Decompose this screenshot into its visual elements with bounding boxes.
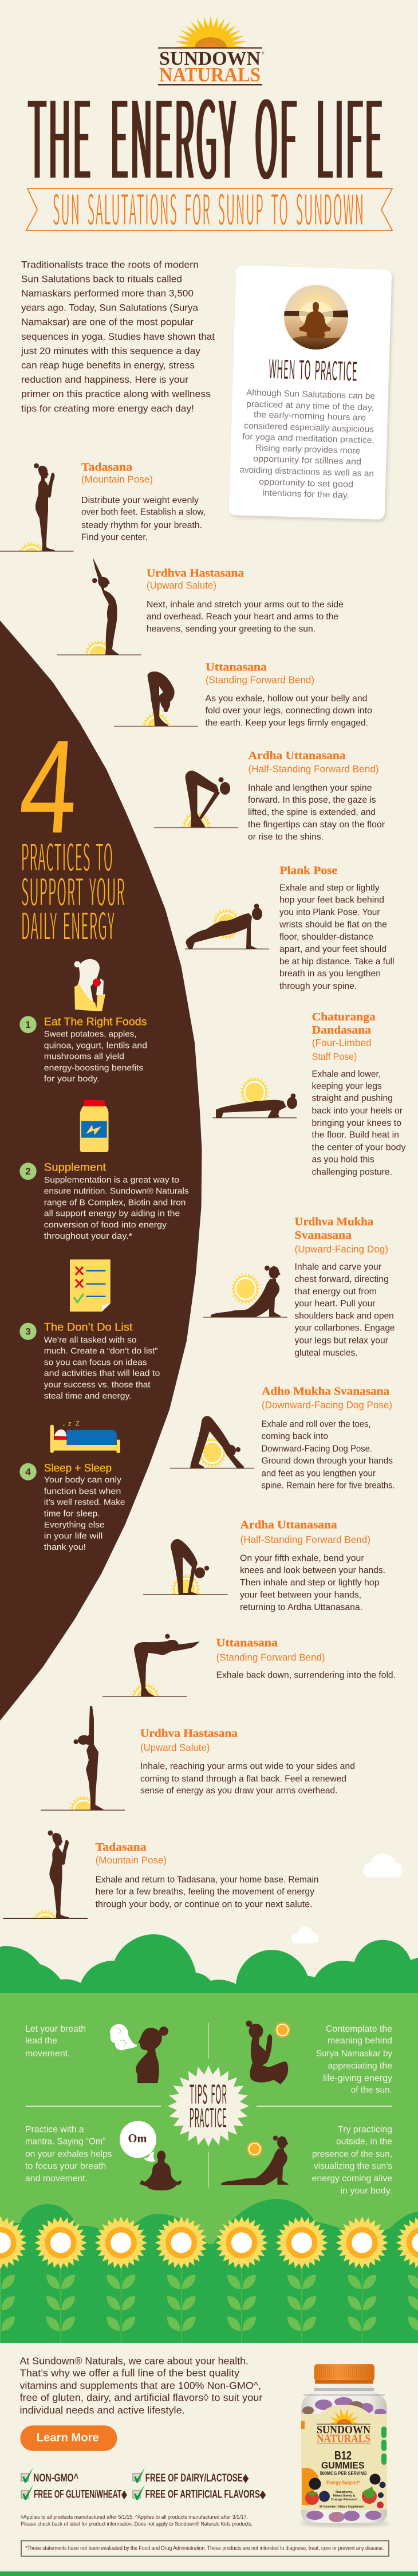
claims checklist: FREE OF DAIRY/LACTOSE◆	[145, 2472, 249, 2484]
pose 8: Adho Mukha Svanasana: spine. Remain here for five breaths.	[261, 1481, 395, 1490]
practice 1: eat the right foods	[19, 959, 147, 1084]
pose 9: Ardha Uttanasana: Then inhale and step or lightly hop	[240, 1578, 380, 1588]
practice 2: supplement: conversion of food into energy	[44, 1220, 167, 1230]
product: B12 gummies bottle: Raspberry,	[336, 2491, 353, 2494]
pose 5: Plank Pose	[185, 865, 395, 991]
card text: opportunity to set good	[259, 477, 353, 489]
product: B12 gummies bottle: 50 Gummies / Dietary Supplement	[320, 2506, 364, 2509]
pose 6: Chaturanga Dandasana: Staff Pose)	[312, 1051, 357, 1062]
icon: woman profile	[136, 2027, 168, 2083]
pose 2: Urdhva Hastasana	[57, 557, 344, 655]
claims checklist: NON-GMO^	[33, 2472, 78, 2484]
icon: bed	[50, 1420, 120, 1453]
icon: bed: Z	[76, 1420, 80, 1427]
product: B12 gummies bottle	[300, 2364, 389, 2527]
intro text: Sun Salutations back to rituals called	[21, 273, 182, 284]
tip 3: mantra: Practice with a	[25, 2125, 84, 2135]
practice 4: sleep + sleep: Your body can only	[44, 1475, 122, 1485]
pose 8: Adho Mukha Svanasana	[170, 1385, 395, 1490]
intro text: tips for creating more energy each day!	[21, 403, 194, 414]
practice 2: supplement: ensure nutrition. Sundown® Naturals	[44, 1186, 189, 1196]
pose 12: Tadasana: through your body, or continue on to your next salute.	[96, 1899, 313, 1909]
pose 2: Urdhva Hastasana: Next, inhale and stretch your arms out to the side	[147, 600, 344, 610]
practice 3: the don't do list: your success vs. those that	[44, 1380, 151, 1390]
product: B12 gummies bottle: SUNDOWN	[317, 2424, 371, 2436]
pose 3: Uttanasana: fold over your legs, connecting down into	[205, 706, 372, 716]
practice 1: eat the right foods: Eat The Right Foods	[44, 1016, 147, 1028]
card heading: WHEN TO PRACTICE	[269, 348, 358, 388]
tip 4: outside: energy coming alive	[312, 2174, 392, 2184]
logo: Sundown Naturals	[158, 16, 265, 86]
product: B12 gummies bottle: GUMMIES	[321, 2460, 364, 2471]
pose 1: Tadasana: (Mountain Pose)	[81, 474, 153, 485]
icon: bed: z	[68, 1420, 71, 1427]
practice 3: the don't do list: and activities that will lead to	[44, 1369, 160, 1379]
icon: meditating figure	[140, 2151, 182, 2190]
pose 6: Chaturanga Dandasana: Exhale and lower,	[311, 1069, 381, 1079]
card text: for yoga and meditation practice.	[242, 432, 374, 445]
pose 7: Urdhva Mukha Svanasana: shoulders back and open	[294, 1311, 394, 1321]
intro text: Namaskars performed more than 3,500	[21, 288, 194, 299]
pose 11: Urdhva Hastasana: Inhale, reaching your arms out wide to your sides and	[140, 1761, 355, 1771]
practice 4: sleep + sleep: Everything else	[44, 1520, 104, 1530]
practice 2: supplement: Supplementation is a great way to	[44, 1175, 179, 1185]
tip 2: contemplate: of the sun.	[351, 2086, 392, 2095]
icon: supplement bottle	[80, 1100, 109, 1152]
logo: Sundown Naturals: SUNDOWN	[159, 48, 261, 69]
tip 1: breath	[25, 2024, 168, 2083]
pose 1: Tadasana: Distribute your weight evenly	[81, 496, 199, 505]
card text: the early-morning hours are	[254, 410, 366, 423]
pose 4: Ardha Uttanasana: Ardha Uttanasana	[249, 749, 346, 762]
practice 3: the don't do list: much. Create a “don’t do list”	[44, 1346, 158, 1356]
intro text: just 20 minutes with this sequence a day	[21, 345, 201, 356]
pose 9: Ardha Uttanasana: knees and look between your hands.	[240, 1565, 385, 1575]
practice 1: eat the right foods: energy-boosting benefits	[44, 1063, 144, 1073]
tip 2: contemplate: Contemplate the	[326, 2024, 392, 2034]
panel heading: 4 practices	[15, 713, 125, 951]
tip 2: contemplate: life-giving energy	[323, 2074, 392, 2083]
pose 12: Tadasana: (Mountain Pose)	[96, 1855, 167, 1866]
closing statement: That’s why we offer a full line of the best quality	[19, 2367, 239, 2379]
pose 10: Uttanasana: Exhale back down, surrendering into the fold.	[216, 1671, 396, 1680]
closing statement: At Sundown® Naturals, we care about your health.	[19, 2355, 249, 2367]
practice 4: sleep + sleep: time for sleep.	[44, 1509, 100, 1519]
pose 7: Urdhva Mukha Svanasana: that energy out from	[294, 1287, 377, 1297]
intro text: can reap huge benefits in energy, stress	[21, 360, 195, 371]
pose 6: Chaturanga Dandasana: straight and pushing	[311, 1094, 393, 1104]
pose 7: Urdhva Mukha Svanasana: Urdhva Mukha	[294, 1215, 373, 1228]
panel heading: 4 practices: PRACTICES TO	[21, 828, 113, 882]
card text	[239, 388, 375, 500]
pose 8: Adho Mukha Svanasana: (Downward-Facing Dog Pose)	[262, 1399, 392, 1411]
claims checklist: FREE OF GLUTEN/WHEAT◆	[34, 2488, 127, 2500]
logo: Sundown Naturals: ®	[262, 52, 265, 56]
practice 2: supplement: all support energy by aiding in the	[44, 1209, 180, 1219]
pose 2: Urdhva Hastasana: Urdhva Hastasana	[147, 567, 244, 580]
tip 4: outside: outside, in the	[336, 2137, 392, 2147]
pose 5: Plank Pose: you into Plank Pose. Your	[279, 908, 380, 917]
intro text: years ago. Today, Sun Salutations (Surya	[21, 303, 199, 313]
card text: Although Sun Salutations can be	[246, 388, 375, 401]
pose 4: Ardha Uttanasana: Inhale and lengthen your spine	[248, 783, 372, 793]
tip 3: mantra: and movement.	[25, 2174, 88, 2184]
pose 11: Urdhva Hastasana	[41, 1706, 354, 1811]
practice 3: the don't do list: steal time and energy.	[44, 1391, 132, 1401]
practice 3: the don't do list: 3	[25, 1326, 31, 1337]
speech bubble: Om: Om	[128, 2131, 147, 2145]
pose 8: Adho Mukha Svanasana: Downward-Facing Dog Pose.	[261, 1444, 372, 1454]
starburst badge: PRACTICE	[189, 2098, 227, 2135]
tip 4: outside: presence of the sun,	[312, 2149, 392, 2159]
practice 2: supplement: throughout your day.*	[44, 1231, 132, 1241]
product: B12 gummies bottle: 500MCG PER SERVING	[320, 2471, 367, 2477]
practice 4: sleep + sleep: function best when	[44, 1486, 121, 1496]
pose 8: Adho Mukha Svanasana: coming back into	[261, 1432, 328, 1442]
pose 11: Urdhva Hastasana: (Upward Salute)	[140, 1742, 210, 1753]
pose 5: Plank Pose: be at hip distance. Take a full	[279, 957, 395, 967]
pose 6: Chaturanga Dandasana: keeping your legs	[311, 1081, 382, 1091]
practice 1: eat the right foods: for your body.	[44, 1074, 100, 1084]
pose 1: Tadasana: Tadasana	[81, 461, 132, 474]
starburst badge	[168, 2065, 249, 2147]
pose 12: Tadasana: Tadasana	[96, 1841, 147, 1854]
tip 3: mantra: mantra. Saying “Om”	[25, 2137, 105, 2147]
speech bubble: Om	[120, 2121, 156, 2162]
product: B12 gummies bottle: Energy Support*	[326, 2480, 360, 2485]
practice 4: sleep + sleep: it’s well rested. Make	[44, 1498, 125, 1507]
pose 8: Adho Mukha Svanasana: Ground down through your hands	[261, 1456, 393, 1466]
starburst badge: TIPS FOR	[190, 2074, 227, 2111]
pose 9: Ardha Uttanasana: your feet between your hands,	[240, 1590, 361, 1600]
pose 9: Ardha Uttanasana: Ardha Uttanasana	[240, 1518, 337, 1531]
tip 2: contemplate: appreciating the	[328, 2061, 392, 2071]
pose 2: Urdhva Hastasana: heavens, sending your greeting to the sun.	[147, 625, 316, 634]
card text: avoiding distractions as well as an	[239, 465, 374, 478]
pose 4: Ardha Uttanasana: forward. In this pose, the gaze is	[248, 795, 376, 805]
practice 1: eat the right foods: 1	[25, 1019, 31, 1030]
tip 4: outside	[221, 2125, 392, 2196]
practice 2: supplement: Supplement	[44, 1161, 107, 1173]
pose 9: Ardha Uttanasana: On your fifth exhale, bend your	[240, 1553, 364, 1563]
pose 7: Urdhva Mukha Svanasana: (Upward-Facing Dog)	[294, 1243, 388, 1255]
pose 4: Ardha Uttanasana	[154, 749, 385, 843]
footer bar	[0, 2571, 418, 2576]
pose 1: Tadasana: Find your center.	[81, 532, 148, 542]
pose 12: Tadasana: Exhale and return to Tadasana, your home base. Remain	[96, 1875, 318, 1885]
practice 2: supplement	[19, 1100, 189, 1241]
practice 4: sleep + sleep: in your life will	[44, 1532, 102, 1541]
pose 7: Urdhva Mukha Svanasana: chest forward, directing	[294, 1274, 389, 1284]
pose 6: Chaturanga Dandasana: the floor. Build heat in	[311, 1130, 399, 1140]
bottle cap	[314, 2364, 374, 2383]
pose 8: Adho Mukha Svanasana: Adho Mukha Svanasana	[262, 1385, 389, 1398]
sunflower row	[0, 2216, 418, 2343]
icon: checklist	[70, 1259, 111, 1311]
pose 7: Urdhva Mukha Svanasana: gluteal muscles.	[294, 1348, 357, 1358]
logo: Sundown Naturals: NATURALS	[159, 64, 261, 86]
pose 1: Tadasana: over both feet. Establish a slow,	[81, 508, 206, 517]
icon: cobra pose with sun	[221, 2135, 289, 2185]
pose 4: Ardha Uttanasana: the fingertips can stay on the floor	[248, 820, 385, 830]
card text: Rising early provides more	[255, 443, 360, 456]
pose 4: Ardha Uttanasana: (Half-Standing Forward Bend)	[249, 763, 379, 775]
fine print: ◊Applies to all products manufactured after 5/1/15. ^Applies to all products manufactured after 3/1/17.	[21, 2514, 248, 2520]
closing statement: individual needs and active lifestyle.	[19, 2404, 185, 2416]
pose 5: Plank Pose: apart, and your feet should	[279, 944, 387, 954]
pose 3: Uttanasana: Uttanasana	[206, 661, 267, 674]
product: B12 gummies bottle: Mixed Berry &	[333, 2495, 355, 2498]
pose 7: Urdhva Mukha Svanasana: Svanasana	[294, 1229, 352, 1242]
tips section background	[0, 1993, 418, 2343]
pose 2: Urdhva Hastasana: and overhead. Reach your heart and arms to the	[147, 612, 338, 622]
tip 3: mantra	[25, 2121, 182, 2190]
button: learn more	[20, 2425, 117, 2451]
tip 2: contemplate: meaning behind	[328, 2036, 392, 2046]
practice 3: the don't do list: so you can focus on ideas	[44, 1357, 147, 1367]
closing statement: vitamins and supplements that are 100% Non-GMO^,	[19, 2379, 261, 2391]
practice 4: sleep + sleep: 4	[25, 1467, 31, 1477]
clouds	[291, 1854, 403, 1943]
intro text: primer on this practice along with wellness	[21, 388, 211, 399]
intro text: sequences in yoga. Studies have shown that	[21, 331, 215, 342]
product: B12 gummies bottle: Orange Flavored	[331, 2498, 357, 2502]
pose 6: Chaturanga Dandasana: Chaturanga	[312, 1011, 376, 1023]
panel heading: 4 practices: 4	[15, 713, 83, 861]
intro text	[21, 259, 215, 414]
pose 6: Chaturanga Dandasana: as you hold this	[311, 1155, 374, 1165]
pose 4: Ardha Uttanasana: or rise to the shins.	[248, 833, 324, 842]
card text: considered especially auspicious	[244, 421, 374, 434]
practice 3: the don't do list	[19, 1259, 160, 1401]
card: when to practice	[229, 265, 393, 522]
practice 1: eat the right foods: Sweet potatoes, apples,	[44, 1029, 136, 1039]
practice 4: sleep + sleep	[19, 1420, 125, 1552]
claims checklist	[21, 2467, 266, 2500]
practice 4: sleep + sleep: thank you!	[44, 1542, 86, 1552]
pose 2: Urdhva Hastasana: (Upward Salute)	[147, 580, 216, 591]
pose 9: Ardha Uttanasana: (Half-Standing Forward Bend)	[240, 1534, 370, 1545]
intro text: Namaksar) are one of the most popular	[21, 317, 194, 328]
tip 2: contemplate: Surya Namaskar by	[316, 2049, 392, 2059]
pose 6: Chaturanga Dandasana: back into your heels or	[311, 1106, 403, 1116]
brown panel shape	[0, 621, 202, 1721]
pose 5: Plank Pose: hop your feet back behind	[279, 895, 384, 905]
pose 7: Urdhva Mukha Svanasana: your collarbones. Engage	[294, 1324, 395, 1333]
closing statement: free of gluten, dairy, and artificial flavors◊ to suit your	[19, 2392, 263, 2404]
claims checklist: FREE OF ARTIFICIAL FLAVORS◆	[145, 2488, 266, 2500]
fine print: Please check back of label for product information. Does not apply to Sundown® Naturals Kids products.	[21, 2521, 253, 2527]
closing statement	[19, 2355, 263, 2416]
practice 3: the don't do list: The Don’t Do List	[44, 1321, 133, 1333]
pose 5: Plank Pose: breath in as you lengthen	[279, 969, 381, 979]
tip 4: outside: visualizing the sun’s	[314, 2161, 392, 2171]
pose 5: Plank Pose: wrists should be flat on the	[279, 920, 387, 929]
pose 3: Uttanasana	[114, 663, 372, 728]
pose 7: Urdhva Mukha Svanasana	[203, 1215, 395, 1358]
photo: meditating silhouette at sunrise	[284, 285, 348, 350]
pose 6: Chaturanga Dandasana	[213, 1011, 406, 1177]
tip 2: contemplate	[246, 2020, 392, 2095]
pose 1: Tadasana	[0, 462, 205, 552]
pose 9: Ardha Uttanasana	[143, 1518, 385, 1612]
product: B12 gummies bottle: B12	[334, 2449, 352, 2462]
card text: intentions for the day.	[262, 488, 349, 500]
pose 7: Urdhva Mukha Svanasana: your heart. Pull your	[294, 1299, 376, 1309]
practice 4: sleep + sleep: Sleep + Sleep	[44, 1462, 112, 1474]
pose 10: Uttanasana	[102, 1634, 395, 1697]
practice 2: supplement: range of B Complex, Biotin and Iron	[44, 1197, 186, 1207]
icon: woman eating apple	[74, 959, 105, 1011]
pose 11: Urdhva Hastasana: coming to stand through a flat back. Feel a renewed	[140, 1774, 346, 1784]
tip 4: outside: in your body.	[341, 2186, 392, 2196]
pose 12: Tadasana: here for a few breaths, feeling the movement of energy	[96, 1887, 314, 1897]
pose 11: Urdhva Hastasana: Urdhva Hastasana	[140, 1727, 238, 1740]
tip 4: outside: Try practicing	[338, 2125, 392, 2135]
pose 3: Uttanasana: the earth. Keep your legs firmly engaged.	[205, 718, 368, 728]
tip 1: breath: lead the	[25, 2036, 57, 2046]
practice 2: supplement: 2	[25, 1166, 31, 1177]
pose 5: Plank Pose: Exhale and step or lightly	[279, 883, 380, 893]
title: THE ENERGY OF LIFE	[28, 54, 385, 210]
panel heading: 4 practices: DAILY ENERGY	[21, 897, 115, 951]
practice 1: eat the right foods: quinoa, yogurt, lentils and	[44, 1040, 147, 1050]
pose 10: Uttanasana: Uttanasana	[216, 1636, 278, 1649]
pose 11: Urdhva Hastasana: sense of energy as you draw your arms overhead.	[140, 1786, 337, 1796]
icon: bed: z	[63, 1424, 65, 1427]
hills	[0, 1934, 418, 1994]
pose 4: Ardha Uttanasana: lifted, the spine is extended, and	[248, 808, 376, 817]
tips for practice	[25, 2020, 392, 2196]
pose 6: Chaturanga Dandasana: (Four-Limbed	[312, 1037, 372, 1049]
pose 3: Uttanasana: As you exhale, hollow out your belly and	[205, 694, 368, 704]
practice 1: eat the right foods: mushrooms all yield	[44, 1051, 124, 1061]
pose 8: Adho Mukha Svanasana: and feet as you lengthen your	[261, 1468, 376, 1478]
pose 8: Adho Mukha Svanasana: Exhale and roll over the toes,	[261, 1420, 371, 1430]
pose 5: Plank Pose: Plank Pose	[279, 865, 337, 877]
pose 3: Uttanasana: (Standing Forward Bend)	[206, 674, 314, 686]
pose 12: Tadasana	[3, 1830, 318, 1919]
practice 3: the don't do list: We’re all tasked with so	[44, 1335, 136, 1345]
pose 10: Uttanasana: (Standing Forward Bend)	[216, 1651, 325, 1663]
intro text: Traditionalists trace the roots of modern	[21, 259, 199, 270]
footer panel	[0, 2343, 418, 2571]
icon: breath cloud	[110, 2024, 137, 2050]
intro text: reduction and happiness. Here is your	[21, 374, 188, 385]
pose 7: Urdhva Mukha Svanasana: Inhale and carve your	[294, 1262, 381, 1272]
pose 5: Plank Pose: floor, shoulder-distance	[279, 932, 373, 942]
icon: seated woman with sun	[246, 2020, 291, 2084]
pose 6: Chaturanga Dandasana: the center of your body	[311, 1143, 406, 1153]
pose 7: Urdhva Mukha Svanasana: your legs but relax your	[294, 1336, 388, 1346]
pose 9: Ardha Uttanasana: returning to Ardha Uttanasana.	[240, 1603, 362, 1612]
tip 3: mantra: to focus your breath	[25, 2161, 106, 2171]
pose 5: Plank Pose: through your spine.	[279, 981, 357, 991]
fine print	[21, 2514, 253, 2527]
pose 6: Chaturanga Dandasana: Dandasana	[312, 1024, 371, 1036]
panel heading: 4 practices: SUPPORT YOUR	[21, 863, 125, 917]
tip 3: mantra: on your exhales helps	[25, 2149, 112, 2159]
card text: opportunity for stillnes and	[253, 454, 361, 467]
disclaimer box	[21, 2540, 389, 2557]
tip 1: breath: Let your breath	[25, 2024, 86, 2034]
button: learn more: Learn More	[37, 2432, 99, 2444]
product: B12 gummies bottle: NATURALS	[317, 2433, 370, 2445]
bottom hills	[0, 2199, 418, 2343]
card text: practiced at any time of the day,	[246, 399, 374, 413]
pose 1: Tadasana: steady rhythm for your breath.	[81, 521, 202, 531]
pose 6: Chaturanga Dandasana: challenging posture.	[311, 1168, 392, 1177]
tip 1: breath: movement.	[25, 2049, 70, 2059]
pose 6: Chaturanga Dandasana: bringing your knees to	[311, 1118, 401, 1128]
